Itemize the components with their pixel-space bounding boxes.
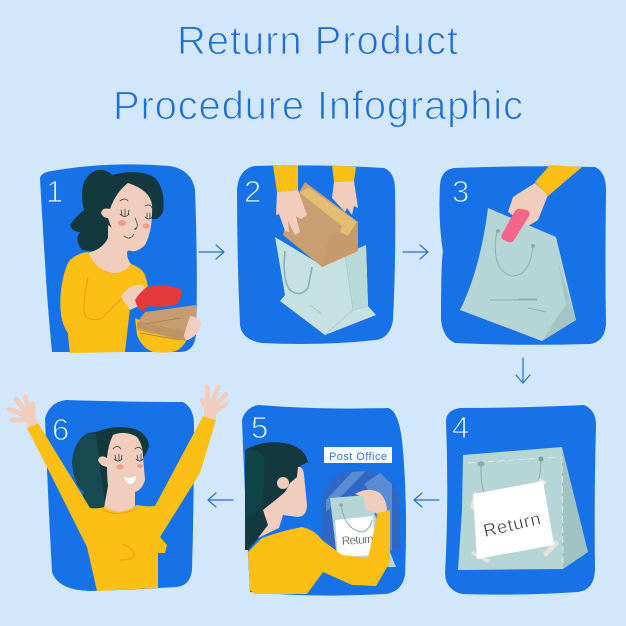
sweater fold line xyxy=(84,277,122,320)
return text: Return xyxy=(481,508,542,541)
neck and chest xyxy=(87,225,135,273)
yellow sweater xyxy=(60,252,148,353)
yellow sweater xyxy=(248,510,390,594)
panel background xyxy=(445,405,596,595)
title: Procedure Infographic xyxy=(113,84,523,128)
panel: step 2 put the box in a bag xyxy=(237,165,395,344)
left sleeve xyxy=(273,165,298,192)
reaching hand xyxy=(355,490,387,514)
arrow: step 4 to 5 xyxy=(414,493,439,507)
panel: step 6 happy customer xyxy=(9,387,226,591)
ear xyxy=(277,477,289,489)
arched window xyxy=(322,470,400,550)
arrow: step 2 to 3 xyxy=(403,245,428,259)
shopping bag xyxy=(460,208,576,341)
step number: 1 xyxy=(46,174,63,209)
panel background xyxy=(45,400,194,591)
left hand raised xyxy=(9,397,37,428)
white label note xyxy=(470,478,559,563)
panel background xyxy=(237,165,395,344)
panel: step 4 label the bag xyxy=(445,405,596,595)
face and neck xyxy=(258,467,307,538)
facial features xyxy=(113,446,143,484)
hair xyxy=(245,442,308,550)
panel background xyxy=(242,405,406,596)
post office sign: Post Office xyxy=(329,451,387,463)
right sleeve xyxy=(332,165,356,182)
right hand xyxy=(332,181,358,215)
yellow sleeve xyxy=(535,165,582,196)
step number: 4 xyxy=(452,410,469,445)
panel background xyxy=(439,166,606,345)
yellow sweater with raised arms xyxy=(27,416,216,591)
arrow: step 5 to 6 xyxy=(208,493,233,507)
title: Return Product xyxy=(177,19,458,63)
pink card xyxy=(501,209,530,242)
step number: 2 xyxy=(244,174,261,209)
step number: 3 xyxy=(452,174,469,209)
hand holding clothes xyxy=(121,285,149,310)
arrow: step 3 to 4 xyxy=(516,358,530,383)
bag in window xyxy=(330,495,396,567)
facial features xyxy=(118,199,152,238)
yellow forearm under box xyxy=(135,318,187,353)
hand under box xyxy=(184,316,201,340)
hair xyxy=(70,170,164,251)
step number: 5 xyxy=(251,410,268,445)
panel: step 3 carry the bag xyxy=(439,165,606,345)
post office sign xyxy=(324,447,392,463)
panel background xyxy=(40,164,197,352)
title xyxy=(113,19,523,128)
panel: step 1 prepare the product xyxy=(40,164,201,353)
shopping bag xyxy=(275,237,376,335)
panel: step 5 post office xyxy=(242,405,406,596)
face and neck xyxy=(98,433,145,515)
chest line and collar xyxy=(103,508,137,560)
return text on bag: Return xyxy=(341,532,374,548)
cardboard boxes xyxy=(137,305,197,341)
hand xyxy=(508,183,548,226)
step number: 6 xyxy=(52,412,69,447)
arrow: step 1 to 2 xyxy=(199,245,224,259)
face xyxy=(101,183,152,251)
box tape xyxy=(300,187,357,236)
return bag xyxy=(458,447,588,570)
right hand raised xyxy=(202,387,226,419)
left hand xyxy=(276,190,307,235)
cardboard box xyxy=(283,182,358,267)
red folded clothes xyxy=(135,285,182,311)
hair xyxy=(72,427,149,510)
